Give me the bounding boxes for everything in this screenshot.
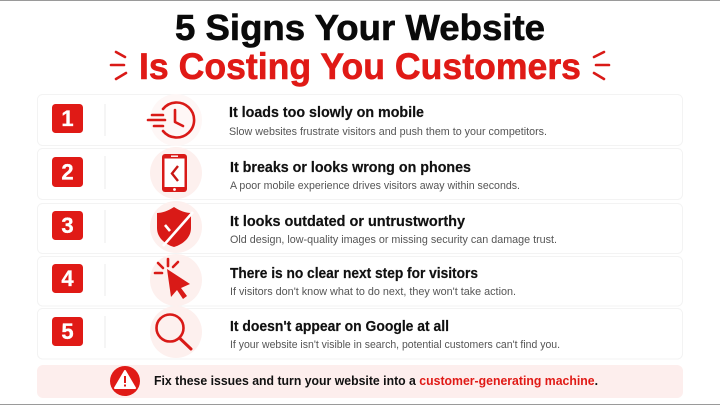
panel: sign 4: If visitors don't know what to do next, they won't take action. [230, 286, 516, 298]
panel: sign 1 [38, 94, 682, 146]
panel: sign 4 [38, 254, 682, 306]
title: Is Costing You Customers [139, 45, 581, 87]
panel: sign 5: 5 [61, 319, 74, 344]
panel: sign 1: Slow websites frustrate visitors and push them to your competitors. [229, 126, 547, 138]
icon: right title burst [594, 52, 609, 79]
panel: sign 5: If your website isn't visible in search, potential customers can't find you. [230, 339, 560, 351]
panel: sign 4: There is no clear next step for visitors [230, 265, 478, 282]
panel: sign 2 [38, 147, 682, 200]
panel: sign 2: 2 [61, 160, 74, 184]
callout [37, 365, 683, 398]
panel: sign 1: It loads too slowly on mobile [229, 104, 424, 121]
panel: sign 2: A poor mobile experience drives visitors away within seconds. [230, 180, 520, 192]
panel: sign 5 [38, 306, 682, 359]
panel: sign 2: It breaks or looks wrong on phones [230, 159, 471, 176]
title: 5 Signs Your Website [175, 7, 545, 48]
icon: broken shield [157, 207, 193, 247]
panel: sign 3: It looks outdated or untrustworthy [230, 213, 466, 230]
icon: fast clock [148, 102, 194, 138]
panel: sign 1: 1 [61, 106, 74, 131]
panel: sign 4: 4 [61, 266, 74, 291]
icon: warning [110, 366, 140, 396]
panel: sign 3: 3 [61, 213, 74, 238]
icon: phone [162, 154, 187, 192]
callout: Fix these issues and turn your website into a customer-generating machine. [154, 373, 598, 388]
icon: left title burst [111, 52, 126, 79]
panel: sign 3 [38, 201, 682, 254]
icon: magnifying glass [156, 314, 191, 349]
title [139, 7, 581, 87]
icon: click cursor [155, 259, 190, 299]
panel: sign 5: It doesn't appear on Google at all [230, 318, 449, 335]
panel: sign 3: Old design, low-quality images or missing security can damage trust. [230, 234, 557, 246]
